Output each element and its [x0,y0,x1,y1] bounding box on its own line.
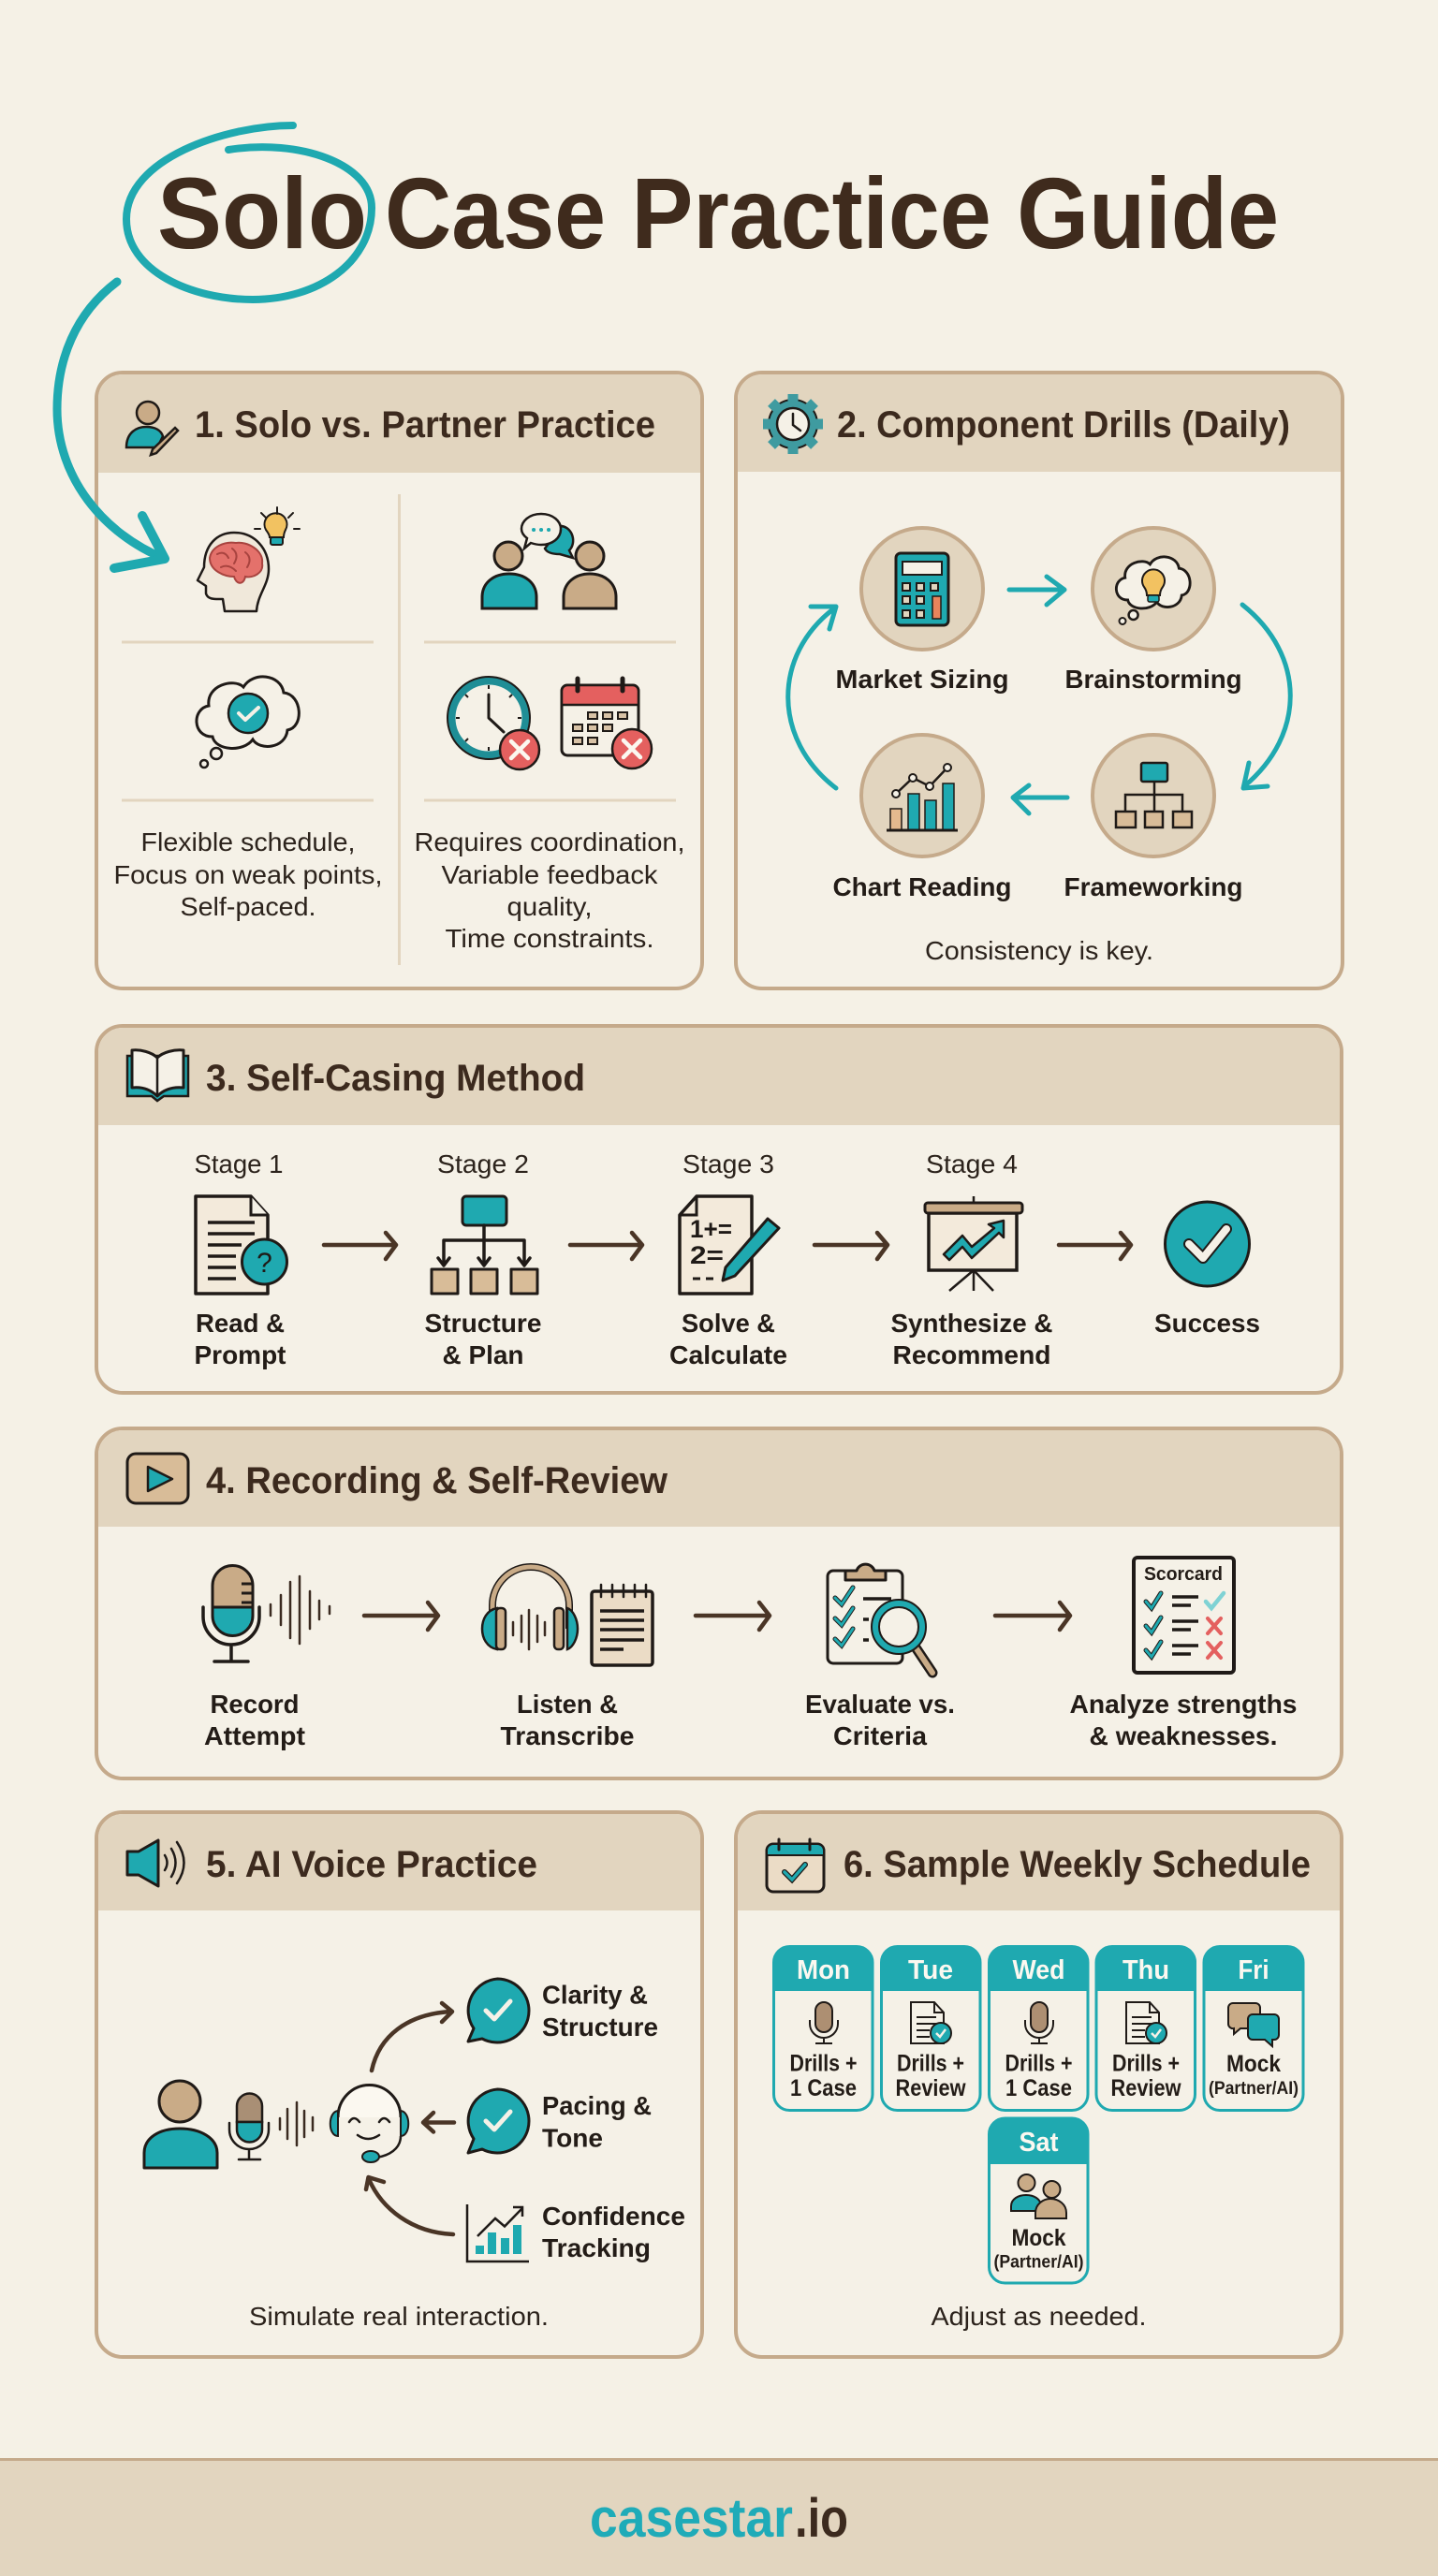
card: Mon: Mon [797,1955,850,1985]
icon: play button [127,1454,188,1503]
stage captions: Solve & [682,1309,775,1338]
step captions: Listen & [517,1690,618,1719]
icon: clipboard with magnifier [828,1564,932,1673]
heading 4: 4. Recording & Self-Review [206,1460,668,1501]
card: Fri: (Partner/AI) [1209,2079,1299,2099]
text: clarity: Clarity & [542,1981,648,2009]
text: clarity [542,1981,658,2042]
icon: clock with x [448,677,539,769]
icon: open book [127,1050,188,1101]
panel: 3. Self-Casing Method [96,1026,1342,1393]
card: Thu: Drills + [1112,2050,1180,2076]
node: Frameworking: Frameworking [1064,872,1243,901]
card: Thu: Review [1110,2075,1181,2101]
panel: 6. Sample Weekly Schedule [736,1812,1342,2357]
flow arrows [364,1603,1070,1630]
text: solo benefits: Focus on weak points, [114,860,382,889]
step captions [204,1690,1298,1750]
icon: scorecard: Scorcard [1144,1564,1223,1585]
card: Mon: 1 Case [790,2075,857,2101]
icon: person [144,2081,217,2168]
stage labels [195,1149,1018,1178]
text: partner drawbacks: Variable feedback [442,860,659,889]
footer band [0,2458,1438,2576]
feedback arrows [366,2003,454,2234]
step captions: Evaluate vs. [805,1690,955,1719]
icon: document with question [196,1196,286,1294]
icon: speaker [127,1840,183,1886]
card: Sat: (Partner/AI) [994,2252,1084,2273]
title: Case Practice Guide [385,156,1279,270]
stage captions: & Plan [442,1340,524,1369]
text: confidence: Confidence [542,2202,685,2231]
cycle arrows [788,577,1290,813]
icon: microphone with waveform [203,1565,330,1661]
stage captions: Prompt [195,1340,286,1369]
heading 6: 6. Sample Weekly Schedule [844,1844,1311,1885]
text: pacing [542,2091,652,2153]
stage labels: Stage 1 [195,1149,283,1178]
card: Tue: Review [895,2075,966,2101]
icon: document with question: ? [257,1248,272,1279]
text: partner drawbacks [414,827,685,953]
icon: calculation sheet with pencil: 1+= [690,1215,732,1243]
arrow: from Solo into panel 1 [57,282,165,568]
icon: gear with clock [763,394,823,454]
stage captions: Recommend [893,1340,1050,1369]
node: Market Sizing [835,528,1009,694]
footer brand: .io [795,2488,848,2549]
card: Sat: Sat [1019,2128,1059,2158]
title: Solo [157,156,367,270]
text: partner drawbacks: quality, [507,892,592,921]
card: Fri: Fri [1238,1955,1269,1985]
icon: presentation board [925,1196,1022,1291]
icon: scorecard [1134,1558,1234,1673]
step captions: Record [210,1690,300,1719]
text: confidence [542,2202,685,2262]
icon: confidence chart [467,2204,529,2261]
text: confidence: Tracking [542,2233,651,2262]
stage captions [195,1309,1260,1369]
heading 1: 1. Solo vs. Partner Practice [195,404,655,446]
card: Wed [989,1945,1089,2110]
card: Thu: Thu [1123,1955,1169,1985]
step captions: Attempt [204,1721,305,1750]
icon: calculation sheet with pencil: 2= [690,1241,724,1269]
card: Wed: 1 Case [1005,2075,1072,2101]
caption 6: Adjust as needed. [931,2302,1146,2331]
stage captions: Read & [196,1309,285,1338]
node: Frameworking [1064,735,1243,901]
stage captions: Calculate [669,1340,787,1369]
node: Brainstorming [1065,528,1241,694]
card: Tue: Tue [908,1955,953,1985]
icon: feedback bubble pacing [468,2089,529,2153]
stage captions: Synthesize & [891,1309,1052,1338]
footer brand: casestar [590,2488,793,2549]
caption 5: Simulate real interaction. [249,2302,549,2331]
panel: 4. Recording & Self-Review [96,1428,1342,1778]
node: Chart Reading [833,735,1011,901]
icon: calendar check [767,1839,824,1892]
icon: calculation sheet with pencil [680,1196,779,1294]
icon: AI head with headset [330,2085,408,2162]
panel: 2. Component Drills [736,373,1343,988]
icon: headphones with notepad [482,1567,653,1665]
stage captions: Success [1154,1309,1260,1338]
heading 2: 2. Component Drills (Daily) [837,404,1290,446]
card: Sat [989,2117,1089,2283]
panel: 5. AI Voice Practice [96,1812,702,2357]
step captions: Analyze strengths [1069,1690,1298,1719]
icon: feedback bubble clarity [468,1979,529,2042]
icon: thought cloud with check [197,677,299,768]
node: Market Sizing: Market Sizing [835,665,1009,694]
icon: structure tree [432,1196,537,1294]
node: Brainstorming: Brainstorming [1065,665,1241,694]
icon: person with pencil [126,402,178,455]
caption 2: Consistency is key. [925,936,1153,965]
stage labels: Stage 3 [682,1149,774,1178]
card: Fri [1203,1945,1304,2110]
stage labels: Stage 2 [437,1149,529,1178]
icon: two people talking [482,514,616,608]
text: solo benefits [114,827,382,921]
stage captions: Structure [425,1309,541,1338]
dividers [122,494,676,965]
icon: success check [1165,1202,1249,1286]
card: Sat: Mock [1011,2225,1066,2251]
text: solo benefits: Flexible schedule, [140,827,356,856]
heading 5: 5. AI Voice Practice [206,1844,537,1885]
text: partner drawbacks: Time constraints. [446,924,653,953]
stage labels: Stage 4 [926,1149,1018,1178]
card: Thu [1095,1945,1196,2110]
text: pacing: Pacing & [542,2091,652,2120]
icon: microphone with waveform [229,2093,313,2159]
flow arrows [324,1233,1131,1259]
hand-drawn circle around Solo [126,125,372,300]
step captions: Criteria [833,1721,927,1750]
card: Tue: Drills + [897,2050,964,2076]
icon: calendar with x [562,679,652,768]
card: Mon [773,1945,873,2110]
text: partner drawbacks: Requires coordination, [414,827,685,856]
text: pacing: Tone [542,2123,603,2153]
icon: head with brain and bulb [198,507,300,611]
heading 3: 3. Self-Casing Method [206,1058,585,1099]
card: Tue [880,1945,981,2110]
card: Fri: Mock [1226,2051,1281,2077]
step captions: & weaknesses. [1090,1721,1277,1750]
card: Wed: Wed [1013,1955,1065,1985]
card: Mon: Drills + [790,2050,858,2076]
step captions: Transcribe [500,1721,635,1750]
node: Chart Reading: Chart Reading [833,872,1011,901]
text: clarity: Structure [542,2012,658,2042]
card: Wed: Drills + [1005,2050,1073,2076]
text: solo benefits: Self-paced. [180,892,316,921]
panel: 1. Solo vs. Partner Practice [96,373,702,988]
